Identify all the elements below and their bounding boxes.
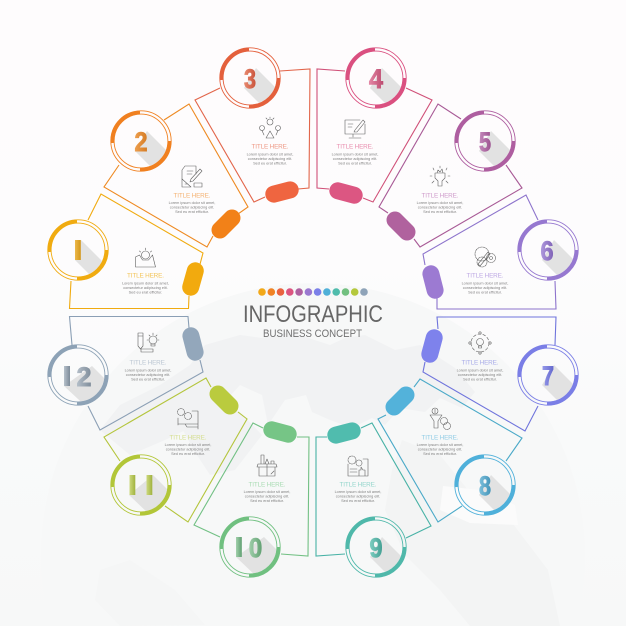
panel 1 pill: [191, 271, 195, 287]
panel 2 outline: [104, 104, 248, 247]
description 5: consectetur adipiscing elit.: [418, 206, 462, 210]
number badge 10: 0: [249, 533, 262, 563]
panel 8: [377, 378, 523, 523]
title 10: TITLE HERE.: [248, 482, 286, 488]
description 12: consectetur adipiscing elit.: [126, 373, 170, 377]
panel 3 pill: [274, 190, 290, 194]
description 3: Lorem ipsum dolor sit amet,: [247, 152, 293, 156]
number badge 12: 2: [76, 362, 92, 392]
title 6: TITLE HERE.: [466, 272, 504, 280]
icon: computer and pen: [345, 120, 365, 138]
panel 12 outline: [70, 316, 203, 430]
number badge 2: 2: [134, 127, 148, 157]
panel 10: [194, 423, 309, 597]
description 6: Lorem ipsum dolor sit amet,: [462, 282, 508, 286]
title 11: TITLE HERE.: [170, 434, 207, 442]
description 1: consectetur adipiscing elit.: [123, 286, 168, 290]
title 3: TITLE HERE.: [252, 144, 289, 150]
number badge 9: 9: [370, 533, 382, 563]
panel 7 pill: [430, 338, 434, 354]
description 9: Lorem ipsum dolor sit amet,: [335, 490, 381, 494]
number badge 6: [517, 219, 579, 281]
number badge 3: 3: [244, 64, 256, 94]
title 2: TITLE HERE.: [174, 192, 211, 200]
icon: team idea: [260, 117, 280, 138]
number badge 12: [47, 344, 109, 406]
description 2: Lorem ipsum dolor sit amet,: [169, 201, 215, 205]
description 4: consectetur adipiscing elit.: [333, 157, 377, 161]
number badge 10: [219, 516, 281, 578]
description 2: Sed eu erat efficitur.: [175, 210, 209, 214]
description 4: Lorem ipsum dolor sit amet,: [332, 152, 378, 156]
description 10: consectetur adipiscing elit.: [245, 494, 289, 498]
icon: box and tools: [257, 455, 277, 476]
description 5: Sed eu erat efficitur.: [423, 210, 457, 214]
icon: funnel and gears: [430, 408, 450, 430]
panel 6 outline: [423, 195, 556, 309]
description 8: consectetur adipiscing elit.: [418, 448, 462, 452]
description 12: Lorem ipsum dolor sit amet,: [125, 368, 171, 372]
number badge 4: 4: [369, 64, 383, 94]
panel 11 outline: [104, 378, 247, 522]
globe: [102, 332, 474, 438]
subheading: BUSINESS CONCEPT: [263, 328, 362, 340]
number badge 9: [345, 516, 407, 578]
description 10: Sed eu erat efficitur.: [250, 499, 284, 503]
panel 7: [423, 317, 594, 431]
description 9: consectetur adipiscing elit.: [336, 494, 380, 498]
title 8: TITLE HERE.: [422, 434, 459, 442]
panel 6 pill: [431, 274, 435, 290]
description 8: Sed eu erat efficitur.: [423, 452, 457, 456]
title 5: TITLE HERE.: [422, 192, 459, 200]
number badge 2: [110, 110, 172, 172]
description 3: Sed eu erat efficitur.: [253, 162, 287, 166]
main heading: INFOGRAPHIC: [243, 301, 383, 328]
description 12: Sed eu erat efficitur.: [131, 378, 165, 382]
title 1: TITLE HERE.: [127, 272, 164, 280]
number badge 1: [47, 219, 109, 281]
description 3: consectetur adipiscing elit.: [248, 157, 292, 161]
description 5: Lorem ipsum dolor sit amet,: [417, 201, 463, 205]
panel 11 pill: [218, 394, 230, 406]
icon: idea landscape: [136, 248, 156, 267]
number badge 7: 7: [542, 361, 554, 391]
icon: gears and pencil: [475, 247, 496, 267]
icon: network bulb: [469, 332, 491, 354]
description 4: Sed eu erat efficitur.: [338, 162, 372, 166]
panel 6: [423, 195, 594, 309]
panel 11: [104, 378, 247, 535]
title 4: TITLE HERE.: [336, 144, 374, 150]
panel 4 pill: [338, 191, 354, 195]
panel 9 outline: [316, 423, 431, 556]
description 6: consectetur adipiscing elit.: [463, 286, 507, 290]
number badge 6: 6: [540, 236, 554, 266]
description 10: Lorem ipsum dolor sit amet,: [244, 490, 290, 494]
number badge 11: [110, 454, 172, 516]
number badge 4: [345, 47, 407, 109]
icon: funnel and sparks: [430, 166, 450, 186]
panel 2: [104, 104, 248, 247]
description 2: consectetur adipiscing elit.: [170, 206, 214, 210]
icon: gears and marker: [178, 408, 198, 429]
description 11: consectetur adipiscing elit.: [166, 448, 210, 452]
description 9: Sed eu erat efficitur.: [341, 499, 375, 503]
title 7: TITLE HERE.: [462, 360, 499, 366]
icon: pencil and bulb: [138, 333, 159, 352]
panel 10 pill: [272, 430, 288, 434]
number badge 8: [454, 454, 516, 516]
title 12: TITLE HERE.: [130, 360, 167, 366]
panel 7 outline: [423, 317, 556, 431]
icon: gears and blueprint: [348, 456, 368, 476]
description 11: Sed eu erat efficitur.: [171, 452, 205, 456]
description 6: Sed eu erat efficitur.: [468, 290, 502, 294]
icon: document and pencil: [182, 166, 202, 187]
panel 4: [317, 48, 432, 202]
panel 2 pill: [220, 218, 232, 230]
description 1: Sed eu erat efficitur.: [129, 290, 162, 294]
panel 9 pill: [336, 431, 352, 435]
panel 8 pill: [394, 395, 406, 407]
description 8: Lorem ipsum dolor sit amet,: [417, 443, 463, 447]
panel 12: [48, 316, 203, 430]
panel 10 outline: [194, 423, 309, 556]
panel 8 outline: [378, 379, 522, 522]
description 1: Lorem ipsum dolor sit amet,: [122, 282, 169, 286]
panel 5: [379, 104, 531, 247]
panel 1: [48, 194, 203, 308]
panel 1 outline: [70, 194, 203, 308]
number badge 5: 5: [479, 127, 491, 157]
panel 9: [316, 423, 431, 597]
description 7: Sed eu erat efficitur.: [463, 378, 497, 382]
description 7: consectetur adipiscing elit.: [458, 373, 502, 377]
description 11: Lorem ipsum dolor sit amet,: [165, 443, 211, 447]
number badge 5: [454, 110, 516, 172]
panel 5 pill: [395, 220, 407, 232]
title 9: TITLE HERE.: [340, 482, 377, 488]
panel 4 outline: [317, 69, 432, 202]
panel 3 outline: [195, 69, 310, 202]
panel 12 pill: [191, 336, 195, 352]
panel 3: [195, 48, 310, 202]
number badge 3: [219, 47, 281, 109]
number badge 7: [517, 344, 579, 406]
description 7: Lorem ipsum dolor sit amet,: [457, 368, 503, 372]
center color dots: [258, 288, 368, 296]
panel 5 outline: [379, 104, 522, 247]
number badge 8: 8: [479, 471, 491, 501]
